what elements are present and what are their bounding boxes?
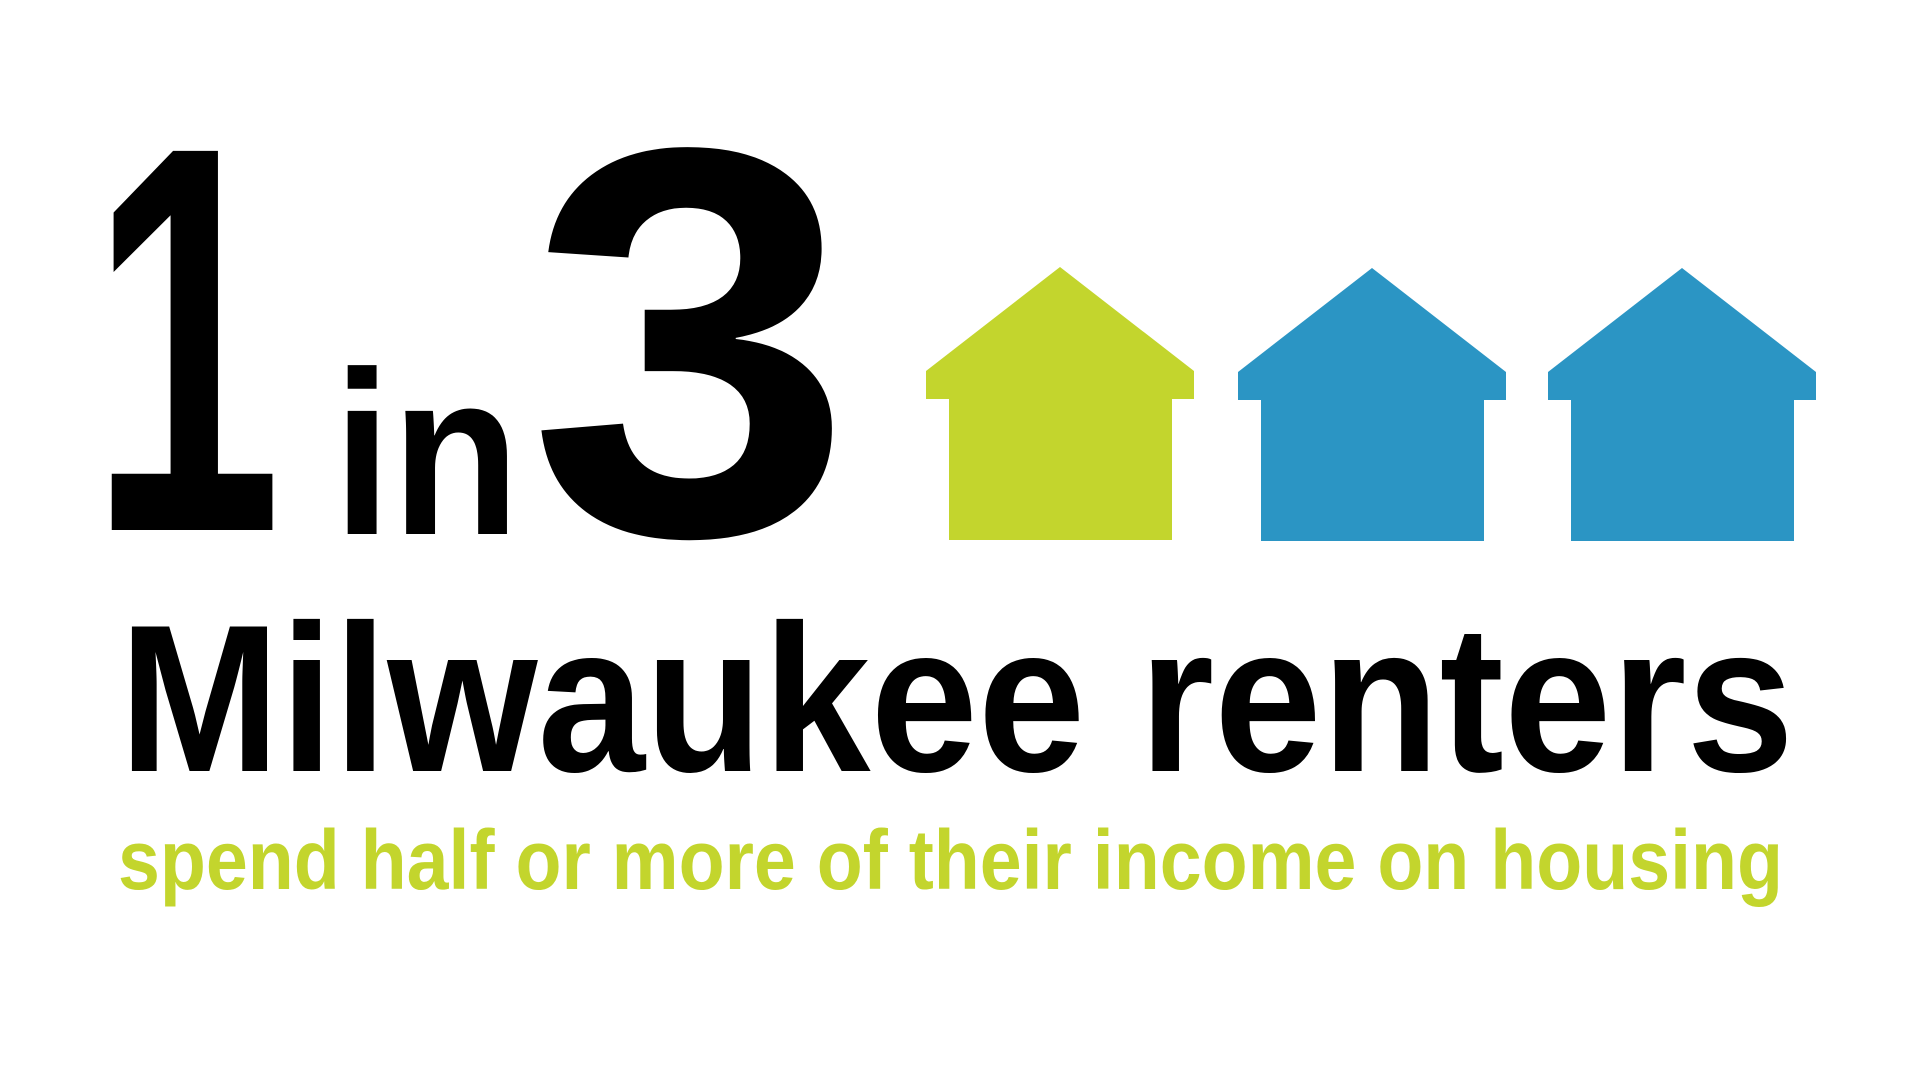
icon: blue house 1: [1238, 268, 1506, 541]
headline stat: 1 in 3: [90, 31, 853, 652]
numeral 1: 1: [90, 31, 282, 647]
subtitle: spend half or more of their income on housing: [118, 813, 1783, 907]
numeral 3: 3: [528, 33, 853, 652]
icon: blue house 2: [1548, 268, 1816, 541]
word in: in: [333, 324, 520, 584]
icon row: houses: [926, 267, 1816, 541]
heading: Milwaukee renters: Milwaukee renters: [119, 581, 1794, 816]
icon: green house: [926, 267, 1194, 540]
